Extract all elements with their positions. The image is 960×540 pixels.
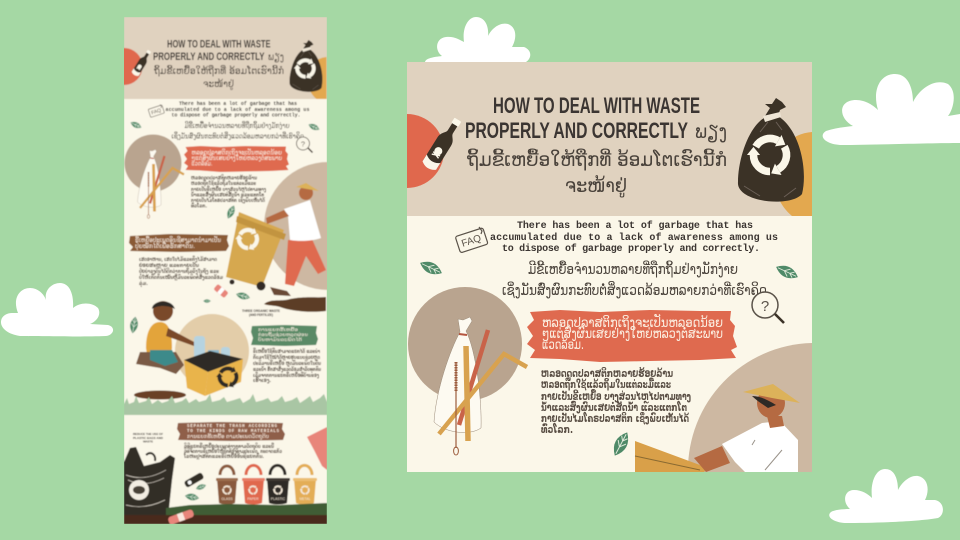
title: PROPERLY AND CORRECTLY — [153, 51, 265, 63]
organic waste caption: THREE ORGANIC WASTE — [242, 309, 280, 313]
icon: FAQ tag — [455, 227, 488, 253]
intro text: accumulated due to a lack of awareness among us — [166, 107, 310, 113]
organic waste body text: ລຸ່ມ. — [139, 280, 148, 288]
intro text: to dispose of garbage properly and correctly. — [502, 243, 760, 255]
green banner — [251, 325, 318, 346]
brown banner text: ຂີ້ເຫຍື້ອປະເພດອິນຊີສາມາດນຳມາເປັນ — [135, 235, 221, 244]
bucket: yellow — [293, 465, 317, 504]
green banner text: ກ່ອນຖິ້ມຊ່ວຍຫລຸດຜ່ອນ — [258, 331, 308, 338]
icon: leaf bottom — [609, 430, 633, 458]
intro text: There has been a lot of garbage that has — [179, 101, 297, 107]
red banner text: ແວດລ້ອມ. — [542, 337, 584, 353]
bucket: brown: GLASS — [221, 497, 233, 501]
separate body text: ໂລຫະປຼາສຕິກແລະຂີ້ເຫຍື້ອອິນຊີແຍກກັນ. — [183, 453, 264, 460]
icon: bottle — [422, 118, 461, 170]
straws body text — [191, 174, 266, 210]
red banner text: ໆແຕ່ສົ່ງຜົນເສຍຢ່າງໃຫຍ່ຫລວງຕໍ່ສະພາບ — [542, 327, 723, 342]
green banner text: ການແຍກຂີ້ເຫຍື້ອ — [258, 326, 298, 333]
icon: leaf left — [418, 258, 444, 278]
panel: enlarged detail (right) — [407, 62, 812, 472]
header band — [124, 17, 327, 99]
straws body text: ກາຍເປັນຂີ້ເຫຍື້ອ ບາງສ່ວນໄຫຼໄປຕາມທາງ — [191, 186, 266, 193]
title: ຈະໜ້າຢູ່ — [203, 79, 234, 90]
title: HOW TO DEAL WITH WASTE — [493, 93, 700, 118]
red striped item — [307, 427, 327, 470]
sorting body text: ເລີ່ມຈາກການແຍກຂີ້ເຫຍື້ອທີ່ບ້ານຂອງ — [253, 372, 319, 379]
straws body text: ຫລອດດູດປລາສຕິກຫລາຍຮ້ອຍລ້ານ — [541, 366, 673, 381]
sorting body text: ເຮົາເອງ. — [253, 377, 271, 384]
organic waste body text: ຍ່ອຍສະຫຼາຍ ແລະກາຍເປັນ — [139, 262, 199, 269]
small caption: WASTE — [143, 440, 153, 444]
title: PROPERLY AND CORRECTLY — [465, 118, 688, 143]
straws body text: ນ້ຳແລະສົ່ງຜົນເສຍຕໍ່ສັດນ້ຳ ແລະແຕກໂຕ — [191, 191, 264, 198]
bucket: black: PLASTIC — [271, 497, 286, 501]
title: ພຽງ — [268, 52, 284, 63]
separate body text: ວິທີຈັດການຂີ້ເຫຍື້ອໃຫ້ຖືກຕ້ອງຕາມປະເພດ, ກະດາດແກ້ວ — [184, 448, 282, 455]
header band — [407, 62, 812, 216]
cloud: bottom right — [829, 469, 943, 523]
organic waste body text: ປຸ໋ຍບຳລຸງດິນໄດ້ດີກວ່າການຖິ້ມລົງໃນຖັງ ແລະ — [139, 268, 219, 276]
intro text: ມີຂີ້ເຫຍື້ອຈຳນວນຫລາຍທີ່ຖືກຖິ້ມຢ່າງມັກງ່າຍ — [184, 121, 290, 130]
illustration: person with box — [635, 343, 812, 472]
straws body text: ທົ່ວໂລກ. — [541, 422, 573, 436]
bucket: brown — [216, 466, 238, 504]
intro text — [490, 220, 778, 299]
soil patch — [134, 390, 186, 400]
bucket: black — [266, 465, 290, 504]
straws body text: ຫລອດຖືກໃຊ້ແລ້ວຖິ້ມໃນແຕ່ລະມື້ແລະ — [541, 377, 671, 391]
intro text: ເຊິ່ງມັນສົ່ງຜົນກະທົບຕໍ່ສິ່ງແວດລ້ອມຫລາຍກວ່າທີ່ເຮົາຄິດ — [502, 281, 767, 299]
straws body text: ນ້ຳແລະສົ່ງຜົນເສຍຕໍ່ສັດນ້ຳ ແລະແຕກໂຕ — [541, 400, 687, 414]
sorting body text: ຂີ້ເຫຍື້ອໃຊ້ຄືນສາມາດແຍກໄດ້ ແລະນຳ — [253, 348, 320, 355]
organic waste body text: ເສດອາຫານ, ເສດໃບໄມ້ແລະກິ່ງໄມ້ສາມາດ — [139, 256, 217, 263]
intro text: to dispose of garbage properly and correctly. — [172, 112, 300, 118]
intro text: accumulated due to a lack of awareness among us — [490, 232, 778, 244]
small caption — [133, 432, 164, 444]
intro text: ເຊິ່ງມັນສົ່ງຜົນກະທົບຕໍ່ສິ່ງແວດລ້ອມຫລາຍກວ່າທີ່ເຮົາຄິດ — [172, 131, 304, 140]
organic waste caption: (AND FERTILIZE) — [249, 313, 273, 317]
intro text — [166, 101, 310, 140]
title: ຖິ້ມຂີ້ເຫຍື້ອໃຫ້ຖືກທີ່ ອ້ອມໂຕເຮົານີ້ກໍ — [466, 147, 727, 171]
red banner text — [542, 315, 723, 353]
person sorting bottles — [136, 301, 249, 396]
icon: small dark bottle — [184, 472, 204, 488]
bucket: yellow: METAL — [299, 497, 311, 501]
sorting body text: ປະລິມານຂີ້ເຫຍື້ອ ຫຼຸດມົນລະພິດໃນດິນ — [253, 360, 321, 368]
sorting body text: ແລະນ້ຳ ຮັກສາສິ່ງແວດລ້ອມສຳລັບທຸກຄົນ — [253, 366, 321, 374]
title: HOW TO DEAL WITH WASTE — [167, 38, 270, 50]
sorting body text: ກັບມາໃຊ້ໃໝ່ໄດ້ຫຼາຍຮູບແບບຊ່ວຍຫຼຸດ — [253, 354, 320, 362]
red circle — [407, 114, 444, 188]
separate banner — [177, 422, 285, 441]
separate banner text: TO THE KINDS OF RAW MATERIALS — [187, 430, 279, 434]
separate banner text — [187, 425, 279, 440]
straws body text: ກາຍເປັນຂີ້ເຫຍື້ອ ບາງສ່ວນໄຫຼໄປຕາມທາງ — [541, 389, 691, 403]
icon: garbage bag — [738, 98, 804, 202]
cloud: top — [425, 17, 530, 62]
bucket: red: PAPER — [247, 497, 259, 501]
brown banner text: ປຸ໋ຍໝັກໄດ້ເພື່ອຮັກສາດິນ. — [135, 241, 195, 251]
separate body text — [183, 443, 282, 460]
title: ຈະໜ້າຢູ່ — [565, 175, 627, 199]
red banner text: ໆແຕ່ສົ່ງຜົນເສຍຢ່າງໃຫຍ່ຫລວງຕໍ່ສະພາບ — [192, 153, 282, 162]
icon: magnifier — [752, 292, 784, 323]
illustration: plastic bag and straws — [408, 287, 527, 455]
organic waste body text — [139, 256, 223, 288]
red banner text: ຫລອດປລາສຕິກເຖິງຈະເປັນຫລອດນ້ອຍ — [192, 147, 282, 156]
top section scaled from detail — [106, 38, 326, 218]
organic waste body text: ບໍ່ໃຫ້ເກີດກິ່ນເໝັນຫຼືມົນລະພິດຕໍ່ສິ່ງແວດລ້ອມ — [139, 274, 223, 281]
person pushing bin — [226, 162, 327, 296]
cloud: right — [823, 74, 960, 145]
green banner text — [258, 326, 308, 343]
icon: red bottle in soil — [167, 509, 195, 525]
icon: leaf right — [774, 262, 800, 282]
intro text: There has been a lot of garbage that has — [517, 220, 753, 232]
grass strip — [124, 394, 327, 415]
straws body text: ກາຍເປັນໄມໂຄຣປລາສຕິກ ເຊິ່ງພົບເຫັນໄດ້ — [191, 197, 265, 204]
straws body text: ກາຍເປັນໄມໂຄຣປລາສຕິກ ເຊິ່ງພົບເຫັນໄດ້ — [541, 411, 689, 425]
organic waste pile — [264, 297, 326, 312]
red banner text: ຫລອດປລາສຕິກເຖິງຈະເປັນຫລອດນ້ອຍ — [542, 315, 723, 331]
title: ຖິ້ມຂີ້ເຫຍື້ອໃຫ້ຖືກທີ່ ອ້ອມໂຕເຮົານີ້ກໍ — [154, 66, 284, 77]
straws body text: ຫລອດດູດປລາສຕິກຫລາຍຮ້ອຍລ້ານ — [191, 174, 257, 182]
separate banner text: SEPARATE THE TRASH ACCORDING — [187, 425, 277, 429]
straws body text: ຫລອດຖືກໃຊ້ແລ້ວຖິ້ມໃນແຕ່ລະມື້ແລະ — [191, 180, 256, 187]
ground — [124, 503, 327, 524]
cloud: left — [1, 283, 113, 336]
icon: red bottle on ground — [213, 284, 229, 298]
separate body text: ວິທີແຍກຂີ້ເຫຍື້ອປະເພດຕ່າງໆຕາມວັດຖຸດິບ ແລະນີ້ — [184, 443, 275, 451]
black plastic bag — [124, 447, 175, 518]
red banner text: ແວດລ້ອມ. — [192, 159, 212, 168]
title — [465, 93, 727, 199]
brown banner text — [135, 235, 221, 251]
green banner text: ບັນຫາມົນລະພິດໄດ້ — [258, 335, 302, 343]
intro text: ມີຂີ້ເຫຍື້ອຈຳນວນຫລາຍທີ່ຖືກຖິ້ມຢ່າງມັກງ່າຍ — [528, 260, 738, 278]
red banner text — [192, 147, 282, 168]
red banner — [527, 310, 737, 362]
organic waste caption — [242, 309, 280, 317]
straws body text — [541, 366, 691, 436]
sorting body text — [253, 348, 321, 384]
panel: full infographic preview (left) — [124, 17, 327, 524]
title — [153, 38, 284, 90]
yellow circle — [780, 132, 812, 216]
separate banner text: ການແຍກຂີ້ເຫຍື້ອ ຕາມປະເພດວັດຖຸດິບ — [187, 433, 269, 440]
title: ພຽງ — [695, 121, 727, 143]
brown banner — [129, 234, 229, 252]
bucket: red — [242, 465, 265, 504]
straws body text: ທົ່ວໂລກ. — [191, 202, 207, 210]
small caption: REDUCE THE USE OF — [133, 432, 163, 436]
small caption: PLASTIC BAGS AND — [133, 436, 164, 440]
